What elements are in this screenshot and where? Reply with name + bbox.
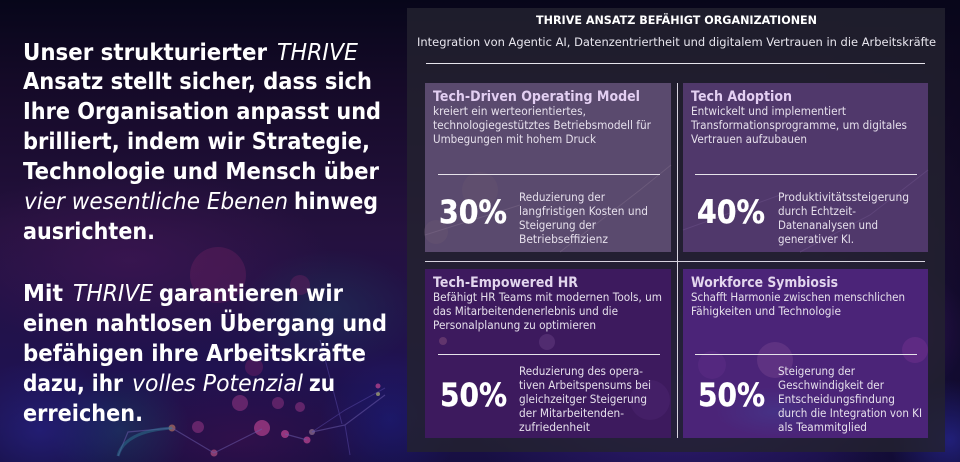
panel: Tech-Empowered HR: Befähigt HR Teams mit modernen Tools, um — [433, 290, 662, 304]
intro text: Technologie und Mensch über — [23, 157, 379, 185]
panel: Workforce Symbiosis: Steigerung der — [778, 364, 855, 378]
panel: Tech-Empowered HR: 50% — [440, 376, 507, 414]
intro text: hinweg — [294, 187, 378, 215]
panel: Tech-Driven Operating Model: Steigerung der — [519, 218, 596, 232]
intro text: garantieren wir — [159, 279, 343, 307]
intro text: ausrichten. — [23, 217, 155, 245]
panel: Tech-Empowered HR: Personalplanung zu optimieren — [433, 318, 596, 332]
panel: Tech-Empowered HR: der Mitarbeitenden- — [519, 406, 624, 420]
intro text: vier wesentliche Ebenen — [24, 187, 288, 215]
panel: Workforce Symbiosis: Schafft Harmonie zwischen menschlichen — [691, 290, 905, 304]
panel: Tech-Empowered HR: zufriedenheit — [519, 420, 590, 434]
intro text: Ihre Organisation anpasst und — [23, 97, 381, 125]
panel: Tech-Driven Operating Model: Reduzierung der — [519, 190, 605, 204]
panel: Tech-Empowered HR: tiven Arbeitspensums bei — [519, 378, 651, 392]
intro text: THRIVE — [73, 279, 153, 307]
panel: Tech Adoption: Transformationsprogramme, um digitales — [690, 118, 907, 132]
intro text: zu — [309, 369, 335, 397]
intro text — [23, 38, 387, 427]
panel: Workforce Symbiosis: Workforce Symbiosis — [691, 275, 838, 291]
panel: Tech Adoption: Produktivitätssteigerung — [778, 190, 909, 204]
panel: Workforce Symbiosis: Fähigkeiten und Technologie — [691, 304, 841, 318]
intro text: Ansatz stellt sicher, dass sich — [23, 67, 372, 95]
panel: Tech-Empowered HR: Reduzierung des opera- — [519, 364, 643, 378]
panel: Tech Adoption: durch Echtzeit- — [778, 204, 856, 218]
panel: Tech-Driven Operating Model: Umbegungen mit hohem Druck — [433, 132, 596, 146]
panel: Tech-Driven Operating Model: langfristigen Kosten und — [519, 204, 648, 218]
panel: Tech Adoption: Datenanalysen und — [778, 218, 878, 232]
panel: Workforce Symbiosis: als Teammitglied — [778, 420, 867, 434]
intro text: erreichen. — [23, 399, 143, 427]
intro text: Mit — [23, 279, 63, 307]
intro text: Unser strukturierter — [23, 38, 267, 66]
panel: Tech Adoption — [683, 83, 928, 252]
intro text: THRIVE — [277, 38, 358, 66]
panel: Tech-Empowered HR: das Mitarbeitendenerlebnis und die — [433, 304, 618, 318]
panel: Tech-Driven Operating Model: 30% — [439, 193, 507, 231]
panel: Tech-Driven Operating Model: kreiert ein werteorientiertes, — [433, 104, 586, 118]
subheading: Integration von Agentic AI, Datenzentriertheit und digitalem Vertrauen in die Arbeitskräfte — [417, 35, 936, 49]
panel: Tech-Empowered HR — [425, 269, 671, 438]
panel: Workforce Symbiosis — [683, 269, 928, 438]
network graphic — [118, 247, 385, 456]
intro text: volles Potenzial — [132, 369, 303, 397]
intro text: brilliert, indem wir Strategie, — [23, 127, 370, 155]
panel: Tech Adoption: Entwickelt und implementiert — [691, 104, 846, 118]
panel: framework — [407, 8, 945, 452]
panel: Tech Adoption: Vertrauen aufzubauen — [691, 132, 807, 146]
panel: Tech Adoption: 40% — [697, 193, 765, 231]
panel: Workforce Symbiosis: Geschwindigkeit der — [778, 378, 884, 392]
panel: Tech-Driven Operating Model: technologiegestütztes Betriebsmodell für — [433, 118, 651, 132]
panel: Tech-Driven Operating Model: Tech-Driven Operating Model — [433, 89, 640, 105]
panel: Tech-Empowered HR: gleichzeitger Steigerung — [519, 392, 647, 406]
panel: Workforce Symbiosis: Entscheidungsfindung — [778, 392, 895, 406]
panel: Tech-Empowered HR: Tech-Empowered HR — [433, 275, 578, 291]
panel: Workforce Symbiosis: 50% — [698, 376, 765, 414]
panel: Tech Adoption: Tech Adoption — [691, 89, 792, 105]
intro text: einen nahtlosen Übergang und — [23, 309, 387, 337]
panel: Tech Adoption: generativer KI. — [778, 232, 854, 246]
intro text: befähigen ihre Arbeitskräfte — [23, 339, 366, 367]
panel: Tech-Driven Operating Model: Betriebseffizienz — [519, 232, 608, 246]
panel: Tech-Driven Operating Model — [424, 83, 671, 252]
heading: THRIVE ANSATZ BEFÄHIGT ORGANIZATIONEN — [536, 12, 817, 27]
panel: Workforce Symbiosis: durch die Integration von KI — [778, 406, 922, 420]
intro text: dazu, ihr — [23, 369, 123, 397]
